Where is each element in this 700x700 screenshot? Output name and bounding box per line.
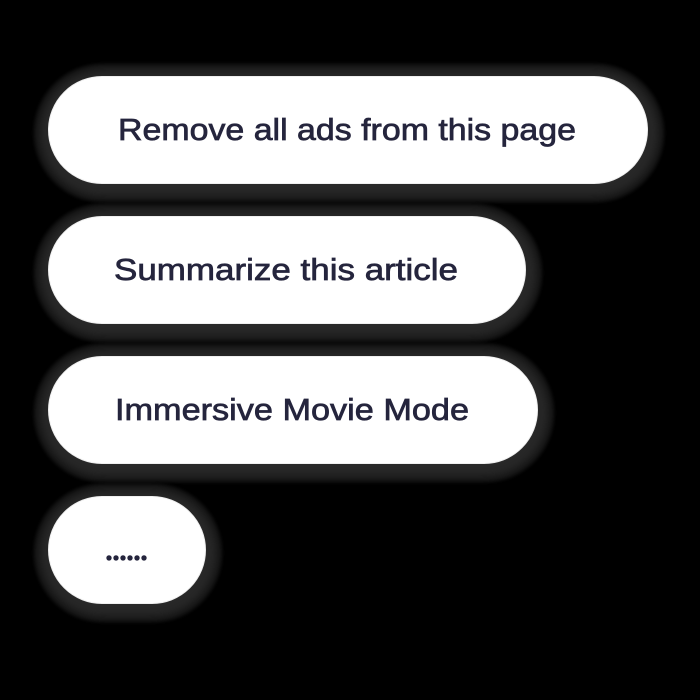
text: remove all ads: Remove all ads from this page	[118, 112, 576, 147]
panel: suggestion pill, more	[48, 496, 206, 604]
text: ellipsis dots: ......	[106, 536, 148, 567]
panel: suggestion pill, summarize	[48, 216, 526, 324]
text: immersive movie mode: Immersive Movie Mode	[115, 392, 469, 427]
text: summarize: Summarize this article	[114, 252, 458, 287]
panel: suggestion pill, remove ads	[48, 76, 648, 184]
panel: suggestion pill, movie mode	[48, 356, 538, 464]
